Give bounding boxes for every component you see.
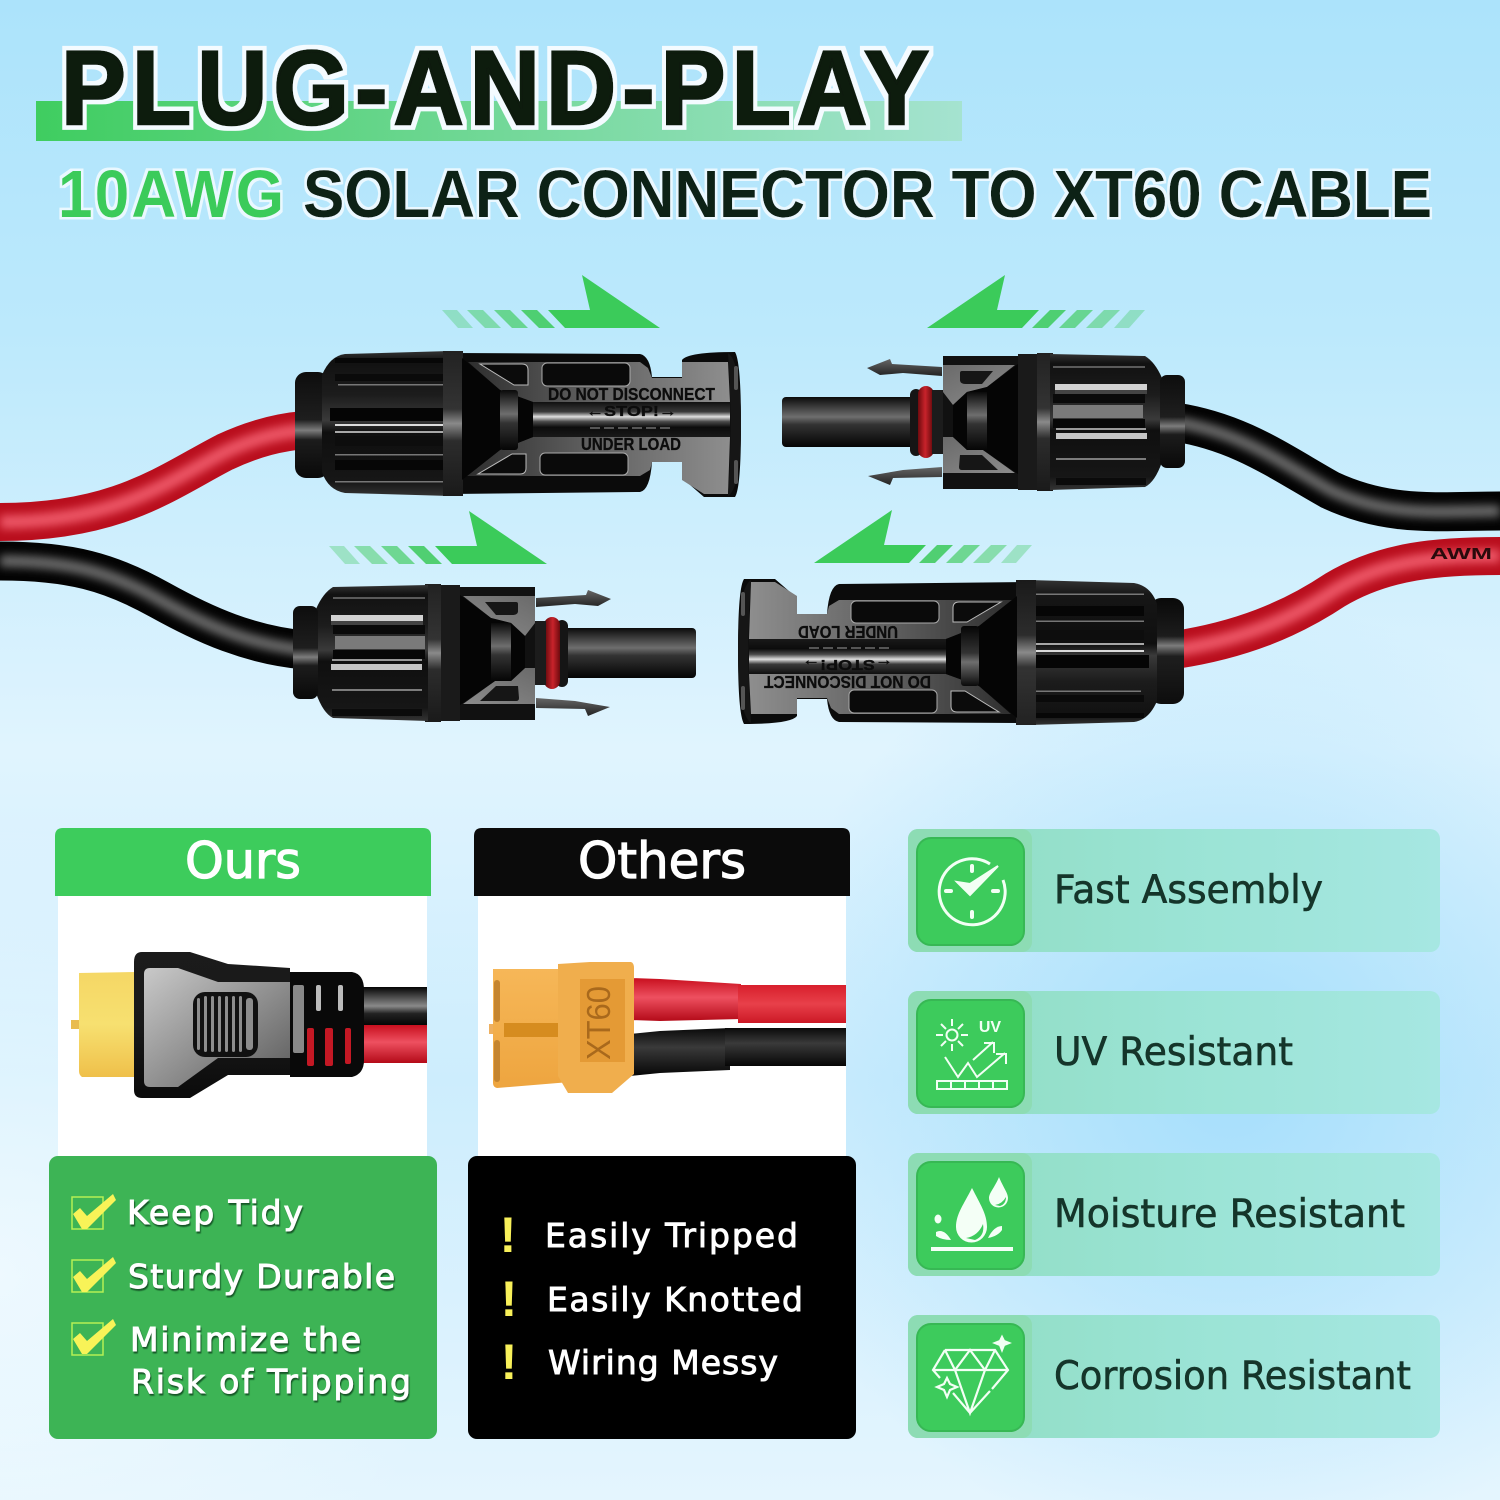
arrow: lower right, pointing left (814, 510, 1032, 563)
cable marking: AWM: AWM (1430, 546, 1492, 563)
arrow: top left, pointing right (442, 275, 660, 328)
black and red cables, right (1175, 422, 1500, 650)
feature: fast assembly (908, 829, 1440, 952)
benefit: sturdy durable: Sturdy Durable (128, 1257, 395, 1296)
connector: top left female: DO NOT DISCONNECT (548, 384, 715, 404)
label: fast assembly: Fast Assembly (1054, 868, 1323, 913)
check: minimize (72, 1319, 116, 1355)
connector: top left female: UNDER LOAD (581, 434, 681, 454)
subtitle: 10AWG (58, 157, 284, 232)
feature: corrosion resistant (908, 1315, 1440, 1438)
benefit: keep tidy: Keep Tidy (127, 1193, 303, 1232)
icon: diamond (933, 1337, 1009, 1413)
check: sturdy durable (72, 1257, 116, 1292)
panel: ours benefits (49, 1156, 437, 1439)
connector: lower left male (293, 584, 696, 722)
label: moisture resistant: Moisture Resistant (1054, 1192, 1405, 1237)
connector: top right male (782, 353, 1185, 491)
benefit: minimize the risk of tripping: Minimize the (130, 1320, 361, 1359)
red and black cables, left (0, 430, 305, 650)
warning: easily knotted: ! (501, 1271, 517, 1327)
connector: lower right female: UNDER LOAD (798, 622, 898, 642)
ours heading: Ours (185, 832, 301, 890)
feature: moisture resistant (908, 1153, 1440, 1276)
drawback: easily knotted: Easily Knotted (547, 1280, 803, 1319)
warning: easily tripped: ! (500, 1207, 516, 1263)
label: uv resistant: UV Resistant (1054, 1030, 1293, 1075)
others photo: standard XT60 connector: XT60 (580, 986, 617, 1060)
connector: lower right female: DO NOT DISCONNECT (764, 672, 931, 692)
subtitle: SOLAR CONNECTOR TO XT60 CABLE (303, 157, 1432, 232)
connector: top left female (295, 351, 741, 497)
warning: wiring messy: ! (501, 1334, 517, 1390)
icon: uv protection (936, 1019, 1007, 1089)
others heading: Others (578, 832, 746, 890)
connector: lower right female: ←STOP!→ (802, 656, 893, 673)
drawback: easily tripped: Easily Tripped (545, 1216, 798, 1255)
others photo: standard XT60 connector (478, 896, 846, 1158)
panel: others drawbacks (468, 1156, 856, 1439)
arrow: lower left, pointing right (329, 511, 547, 564)
drawback: wiring messy: Wiring Messy (548, 1343, 778, 1382)
icon: clock with check (939, 859, 1005, 925)
icon: water drops (931, 1177, 1013, 1251)
benefit: minimize the risk of tripping (130, 1320, 411, 1401)
connector: lower right female (738, 579, 1184, 725)
icon text: UV: UV (979, 1019, 1001, 1036)
ours heading (55, 828, 431, 896)
check: keep tidy (72, 1194, 116, 1229)
connector: top left female: ←STOP!→ (586, 403, 677, 420)
panel: ours (55, 828, 431, 1158)
panel: others (474, 828, 850, 1158)
arrow: top right, pointing left (927, 275, 1145, 328)
others heading (474, 828, 850, 896)
feature: uv resistant (908, 991, 1440, 1114)
benefit: minimize the risk of tripping: Risk of Tripping (131, 1362, 411, 1401)
title: PLUG-AND-PLAY (61, 31, 929, 147)
label: corrosion resistant: Corrosion Resistant (1054, 1354, 1411, 1399)
ours photo: slim XT60 connector (58, 896, 427, 1158)
